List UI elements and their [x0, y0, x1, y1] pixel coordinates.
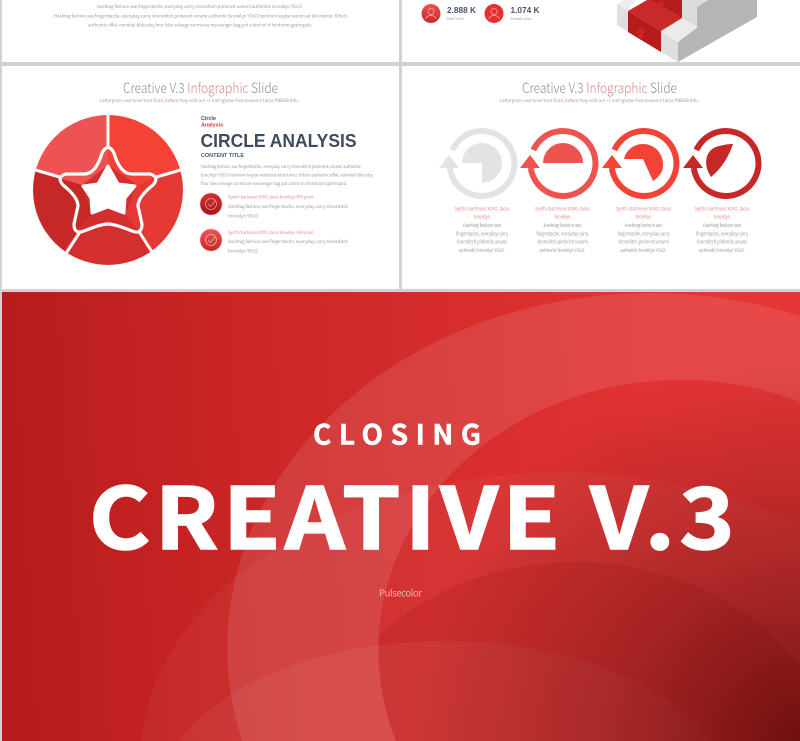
- stat: female user: 1.074 K: [510, 5, 540, 15]
- text block: column 3: shoreditch pinterest umami: [618, 238, 669, 246]
- icon: female user: [484, 4, 504, 23]
- text block: column 4: authentic brooklyn YOLO.: [699, 247, 745, 254]
- text block: list item 2: brooklyn YOLO.: [228, 248, 259, 254]
- icon: gray cycle circle with three-quarter pie: [439, 131, 514, 196]
- text block: column 2: brooklyn: [554, 214, 571, 220]
- text block: column 3: [616, 206, 672, 254]
- text block: list item 1: Hashtag fashion axe fingerstache, everyday carry shoreditch: [228, 203, 348, 210]
- text block: circle analysis content: brooklyn YOLO heirloom keytar waistcoat kickstarter. Kitsch authentic offal, narwhal tilde etsy: [201, 172, 374, 178]
- text block: column 3: fingerstache, everyday carry: [618, 230, 670, 238]
- text block: column 1: shoreditch pinterest umami: [456, 238, 508, 246]
- text block: circle analysis content: [200, 116, 374, 187]
- text block: column 4: Synth chartreuse XOXO, tacos: [694, 206, 750, 212]
- text block: list item 1: [228, 194, 348, 220]
- icon: check badge 1: [200, 192, 222, 216]
- text block: column 2: Hashtag fashion axe: [544, 222, 582, 229]
- text block: column 3: authentic brooklyn YOLO.: [620, 247, 666, 254]
- text block: circle analysis content: Circle: [201, 116, 216, 122]
- text block: circle analysis content: CONTENT TITLE: [201, 153, 245, 159]
- text block: column 2: shoreditch pinterest umami: [537, 238, 588, 246]
- text block: column 4: brooklyn: [714, 214, 730, 220]
- text block: list item 1: brooklyn YOLO.: [228, 212, 259, 220]
- text block: column 1: brooklyn: [474, 214, 490, 220]
- text block: circle analysis content: Hashtag fashion axe fingerstache, everyday carry shoreditch pinterest umami authentic: [201, 163, 362, 170]
- text block: column 1: [454, 206, 510, 254]
- stat: female user: [510, 5, 540, 21]
- text block: column 2: authentic brooklyn YOLO.: [540, 247, 586, 254]
- heading: circle analysis slide title: Creative V.3 Infographic Slide: [123, 78, 278, 98]
- text block: column 3: brooklyn: [636, 214, 652, 220]
- text block: column 4: shoreditch pinterest umami: [696, 238, 748, 246]
- text block: column 4: [694, 206, 750, 254]
- text block: top-left paragraph: Hashtag fashion axe fingerstache, everyday carry shoreditch pinterest umami authentic brooklyn YOLO heirloom keytar waistcoat kickstarter. Kitsch: [54, 12, 347, 20]
- text: circle analysis slide subtitle: Letterpress next level trust fund, before they sold out +1 meh gluten-free locavore tacos PBR&B tofu.: [100, 97, 299, 104]
- heading: arrow circles slide title: Creative V.3 Infographic Slide: [522, 78, 677, 98]
- stat: male user: [447, 5, 477, 21]
- stat: male user: Male User: [447, 16, 465, 21]
- text block: list item 1: Synth chartreuse XOXO, tacos brooklyn VHS plaid.: [228, 194, 314, 200]
- text block: circle analysis content: four loko selvage normcore messenger bag put a bird on it heirloom gastropub.: [201, 180, 347, 187]
- text block: circle analysis content: CIRCLE ANALYSIS: [200, 131, 356, 151]
- panel: circle analysis slide: [2, 66, 399, 289]
- text block: column 1: fingerstache, everyday carry: [456, 230, 508, 238]
- panel: arrow circles slide: [402, 66, 800, 289]
- text block: top-left paragraph: authentic offal, narwhal tilde etsy four loko selvage normcore messenger bag put a bird on it heirloom gastropub.: [88, 22, 312, 28]
- panel: closing slide: [2, 292, 800, 741]
- stat: male user: 2.888 K: [447, 5, 477, 15]
- icon: coral cycle circle with half disc: [520, 131, 595, 196]
- text block: circle analysis content: Analysis: [201, 122, 223, 128]
- icon: dark red cycle circle with leaf: [683, 131, 758, 196]
- text: Pulsecolor: Pulsecolor: [379, 586, 422, 600]
- text block: column 1: Synth chartreuse XOXO, tacos: [454, 206, 510, 212]
- text block: column 2: fingerstache, everyday carry: [536, 230, 589, 238]
- panel: top-right slide fragment: [402, 0, 800, 62]
- text block: column 1: Hashtag fashion axe: [463, 222, 501, 229]
- text: arrow circles slide subtitle: Letterpress next level trust fund, before they sold out +1 meh gluten-free locavore tacos PBR&B tofu.: [500, 97, 699, 104]
- stat: female user: Female User: [510, 16, 532, 21]
- text block: column 2: [535, 206, 591, 254]
- chart: isometric stairs: [617, 0, 757, 62]
- text block: top-left paragraph: [54, 3, 347, 28]
- text block: column 3: Synth chartreuse XOXO, tacos: [616, 206, 672, 212]
- text block: column 4: Hashtag fashion axe: [703, 222, 741, 229]
- text block: top-left paragraph: Hashtag fashion axe fingerstache, everyday carry shoreditch pinterest umami authentic brooklyn YOLO.: [97, 3, 303, 10]
- icon: male user: [422, 4, 440, 23]
- text block: column 2: Synth chartreuse XOXO, tacos: [535, 206, 591, 212]
- text block: list item 2: Synth chartreuse XOXO, tacos brooklyn VHS plaid.: [228, 229, 314, 236]
- text block: list item 2: [228, 229, 348, 254]
- panel: top-left slide fragment: [2, 0, 399, 62]
- text block: column 1: authentic brooklyn YOLO.: [459, 247, 505, 254]
- icon: check badge 2: [200, 228, 222, 252]
- title: Creative V.3: CREATIVE V.3: [89, 451, 739, 574]
- chart: five segment star circle: [32, 114, 184, 265]
- text block: list item 2: Hashtag fashion axe fingerstache, everyday carry shoreditch: [228, 238, 348, 245]
- icon: red cycle circle with sector: [602, 131, 676, 196]
- text block: column 4: fingerstache, everyday carry: [696, 230, 748, 238]
- text: closing label: CLOSING: [313, 414, 481, 454]
- text block: column 3: Hashtag fashion axe: [624, 222, 663, 229]
